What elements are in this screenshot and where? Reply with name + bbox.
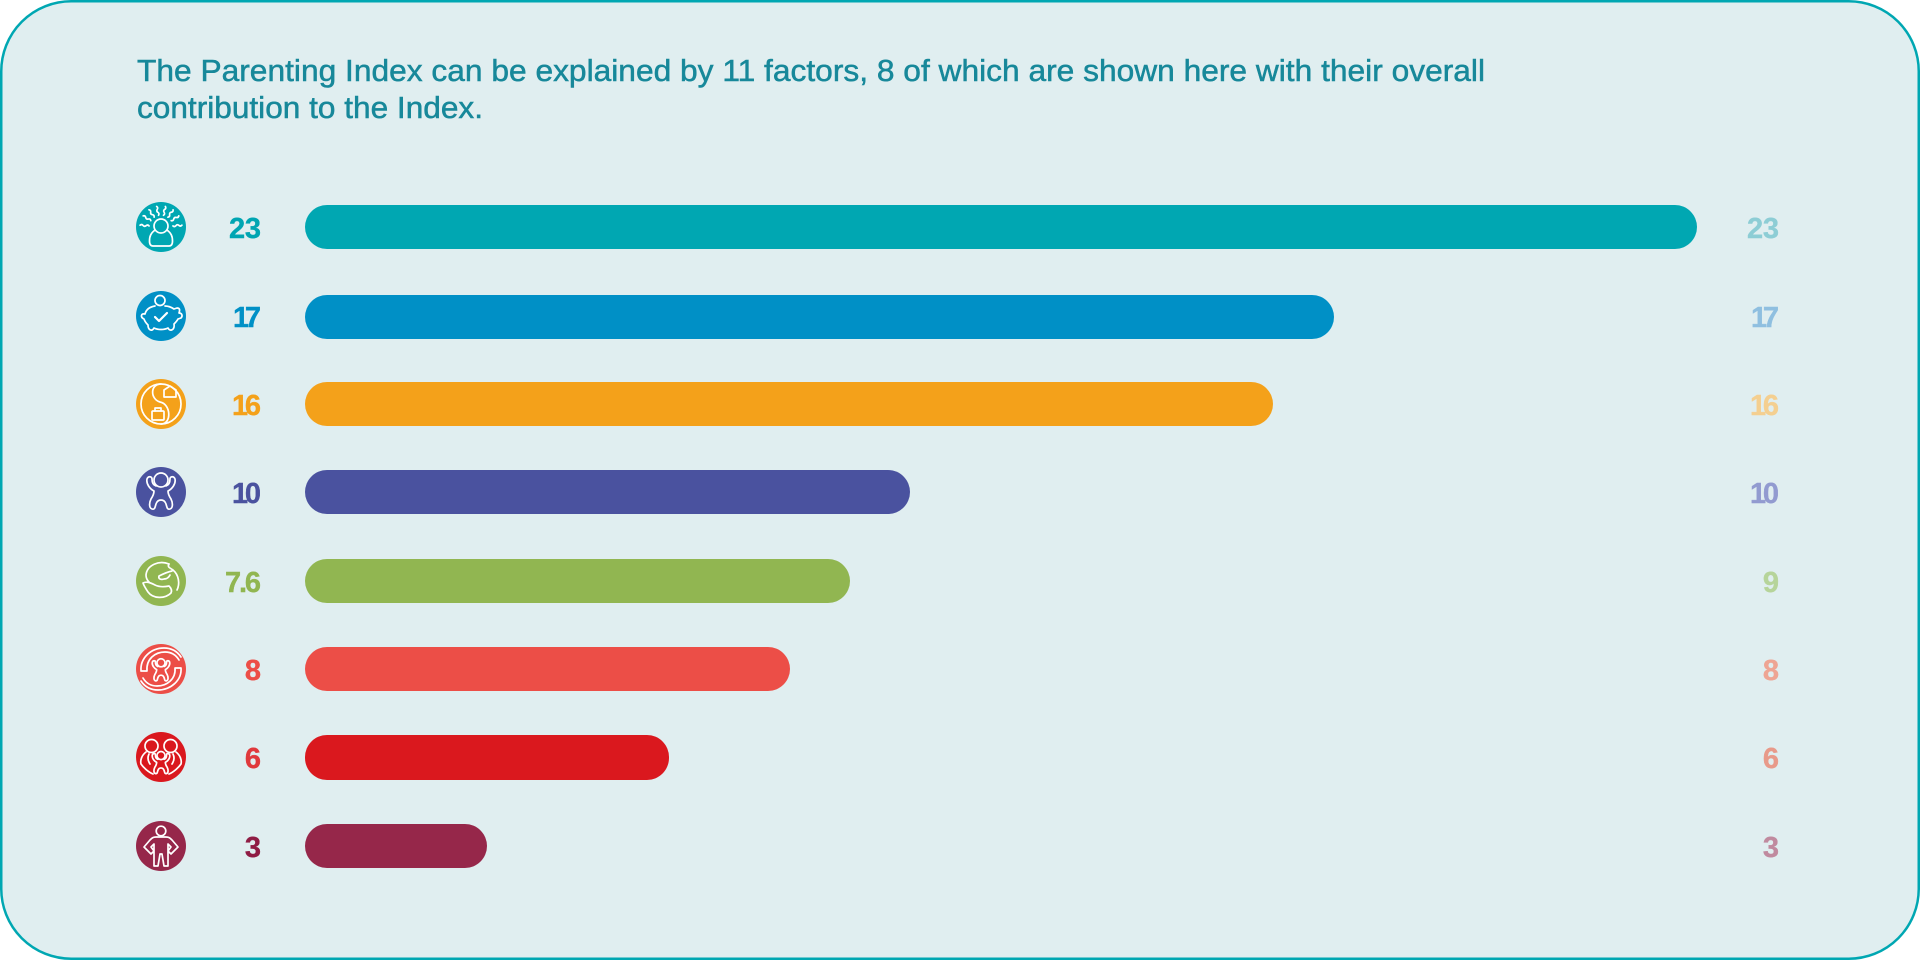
row 5: green factor: [136, 556, 1779, 606]
bar 10: [305, 470, 910, 514]
bar 16: [305, 382, 1273, 426]
icon: person with hands on hips: [136, 821, 186, 871]
right value 17: 17: [1751, 302, 1779, 334]
icon: two parents holding child: [136, 732, 186, 782]
title: The Parenting Index can be explained by 11 factors, 8 of which are shown here with their overall: [137, 53, 1485, 88]
bar 17: [305, 295, 1334, 339]
bar 9: [305, 559, 850, 603]
left value 3: 3: [245, 832, 261, 864]
icon: child with raised arms: [136, 467, 186, 517]
bar 6: [305, 735, 669, 780]
title: contribution to the Index.: [137, 90, 483, 125]
row 3: orange factor: [136, 379, 1779, 429]
title: [137, 53, 1485, 125]
left value 8: 8: [245, 655, 261, 687]
left value 10: 10: [232, 478, 261, 510]
icon: piggy bank with check: [136, 291, 186, 341]
row 1: teal factor: [136, 202, 1779, 252]
right value 8: 8: [1763, 655, 1779, 687]
right value 6: 6: [1763, 743, 1779, 775]
bar 8: [305, 647, 790, 691]
left value 23: 23: [229, 213, 261, 245]
left value 7.6: 7.6: [225, 567, 261, 599]
row 4: indigo factor: [136, 467, 1779, 517]
row 2: blue factor: [136, 291, 1779, 341]
row 8: maroon factor: [136, 821, 1779, 871]
row 6: coral factor: [136, 644, 1779, 694]
bar 3: [305, 824, 487, 868]
right value 9: 9: [1763, 567, 1779, 599]
right value 3: 3: [1763, 832, 1779, 864]
icon: child inside cycle arrows: [136, 644, 186, 694]
icon: yin-yang with house and briefcase: [136, 379, 186, 429]
right value 23: 23: [1747, 213, 1779, 245]
icon: person with radiating lines: [136, 202, 186, 252]
left value 16: 16: [232, 390, 261, 422]
left value 17: 17: [233, 302, 261, 334]
icon: cupped hands: [136, 556, 186, 606]
right value 16: 16: [1750, 390, 1779, 422]
row 7: red factor: [136, 732, 1779, 782]
bar 23: [305, 205, 1697, 249]
left value 6: 6: [245, 743, 261, 775]
right value 10: 10: [1750, 478, 1779, 510]
